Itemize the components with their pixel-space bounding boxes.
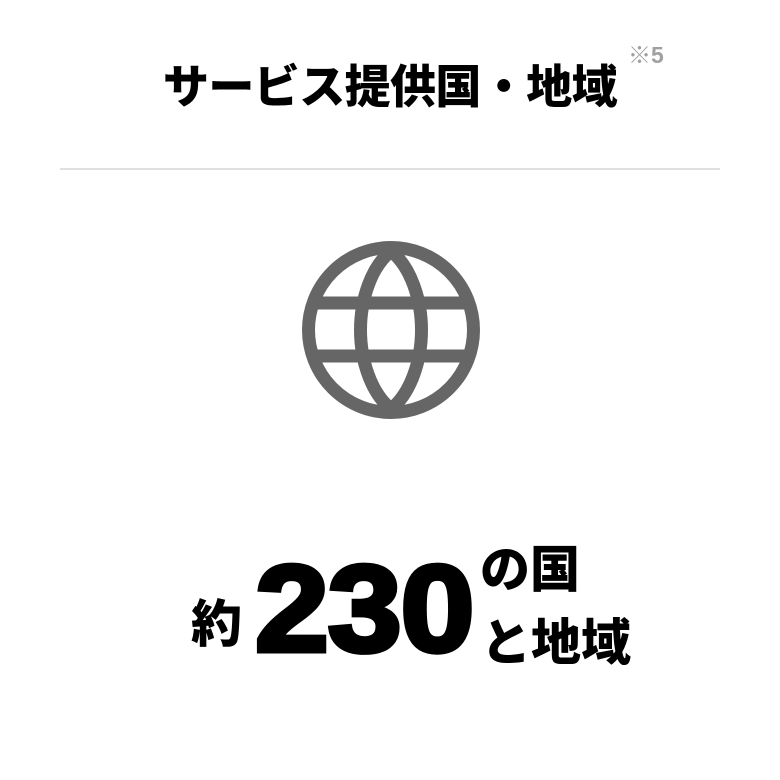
divider: [60, 168, 720, 170]
suffix line 1: の国: [480, 542, 580, 598]
prefix: 約: [191, 596, 242, 653]
title: サービス提供国・地域: [163, 61, 617, 113]
icon: globe: [302, 241, 480, 419]
statistic: about 230 countries and regions: [191, 541, 631, 678]
number: 230: [255, 541, 473, 678]
suffix line 2: と地域: [481, 615, 631, 671]
footnote marker: ※5: [628, 42, 664, 68]
